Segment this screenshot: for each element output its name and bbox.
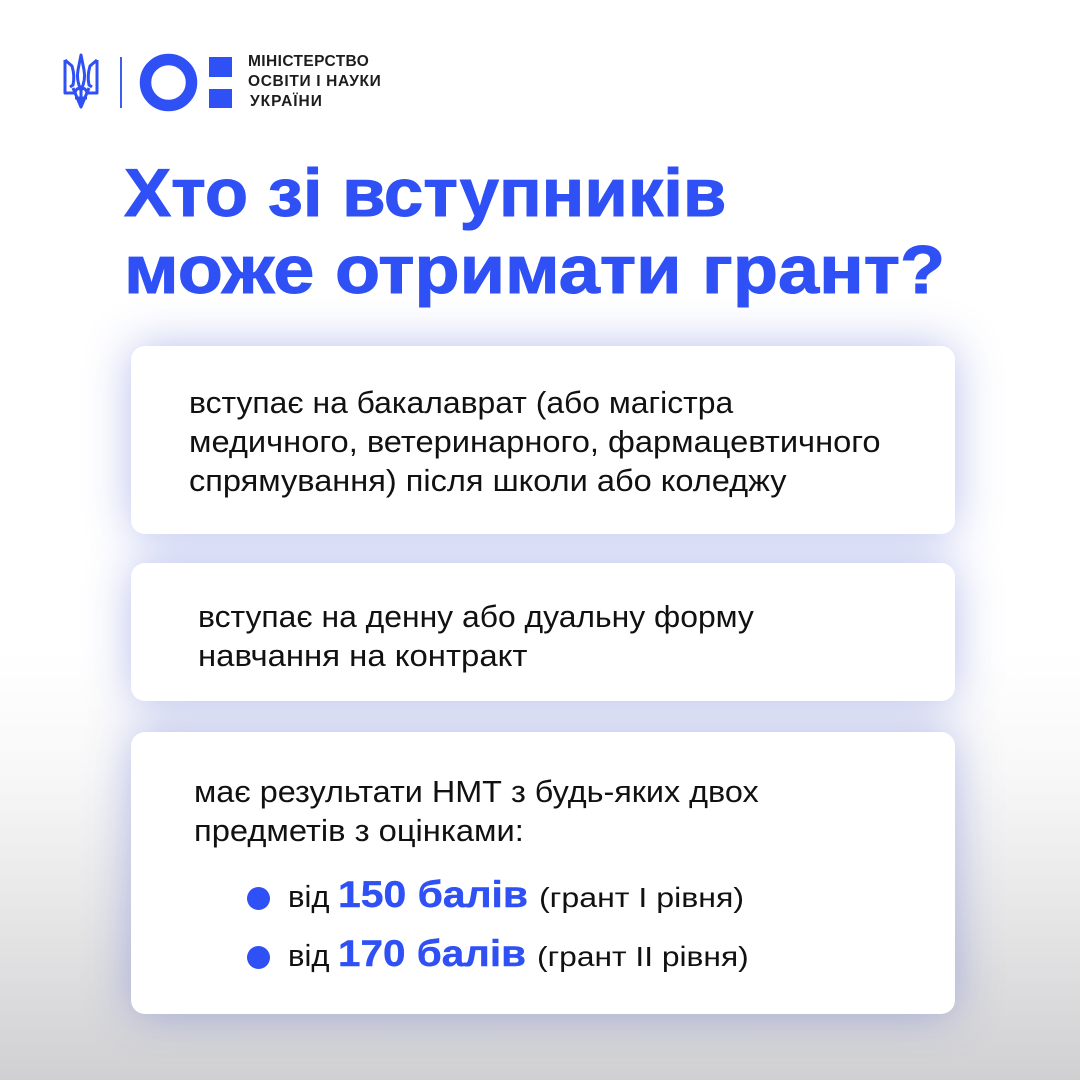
text: admission level: спрямування) після школи або коледжу xyxy=(189,463,787,498)
icon: square bottom xyxy=(208,89,232,108)
text: admission level xyxy=(189,385,881,498)
icon: square top xyxy=(208,57,232,77)
text: test requirement: має результати НМТ з будь-яких двох xyxy=(194,774,759,809)
text: grant level one: 150 балів xyxy=(338,874,528,915)
text: grant level two: 170 балів xyxy=(338,933,526,974)
bullet 1 xyxy=(247,874,744,915)
text: test requirement: предметів з оцінками: xyxy=(194,813,524,848)
icon: trident xyxy=(64,54,98,108)
text: grant level two xyxy=(288,933,749,974)
text: grant level two: (грант II рівня) xyxy=(537,941,749,972)
text: test requirement xyxy=(194,774,759,848)
text: study form xyxy=(198,599,754,673)
ministry name: МІНІСТЕРСТВО xyxy=(248,53,369,70)
ministry name: УКРАЇНИ xyxy=(250,93,323,110)
title: може отримати грант? xyxy=(124,232,945,308)
text: grant level one: (грант I рівня) xyxy=(539,882,744,913)
text: study form: навчання на контракт xyxy=(198,638,527,673)
title: Хто зі вступників xyxy=(124,155,726,231)
text: grant level one: від xyxy=(288,879,329,914)
text: grant level one xyxy=(288,874,744,915)
icon: bullet xyxy=(247,887,270,910)
logo xyxy=(64,53,381,112)
title xyxy=(124,155,945,308)
panel: bachelor admission xyxy=(131,346,955,534)
text: grant level two: від xyxy=(288,938,329,973)
icon: bullet xyxy=(247,946,270,969)
panel: study form xyxy=(131,563,955,701)
panel: test results xyxy=(131,732,955,1014)
ministry name: ОСВІТИ І НАУКИ xyxy=(248,73,381,90)
text: study form: вступає на денну або дуальну форму xyxy=(198,599,754,634)
text: admission level: вступає на бакалаврат (або магістра xyxy=(189,385,733,420)
divider xyxy=(120,57,122,108)
icon: ring xyxy=(140,54,198,112)
bullet 2 xyxy=(247,933,749,974)
ministry name xyxy=(248,53,381,110)
text: admission level: медичного, ветеринарного, фармацевтичного xyxy=(189,424,881,459)
